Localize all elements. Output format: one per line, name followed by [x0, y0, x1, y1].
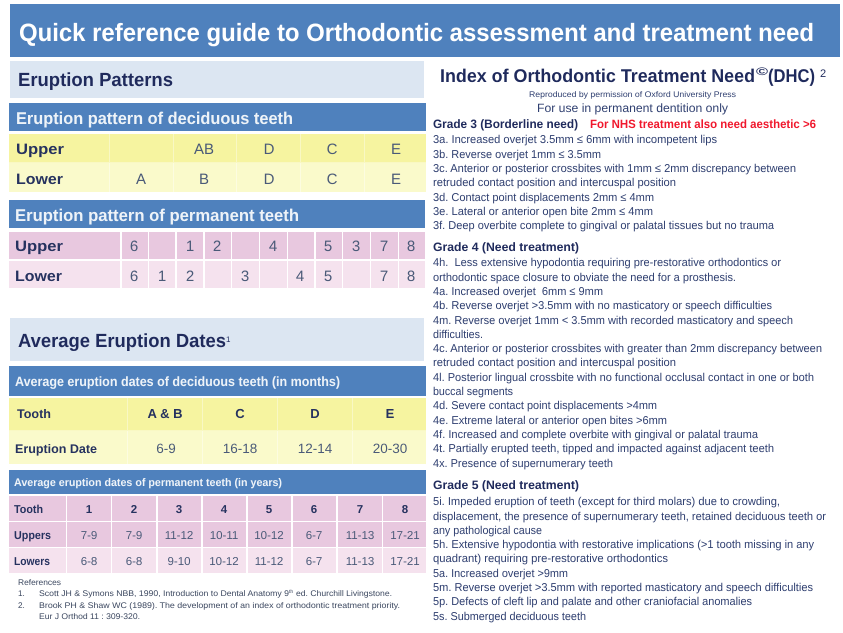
table: eruption pattern of permanent teeth: 5 [324, 238, 332, 255]
grade 4: Grade 4 (Need treatment) [433, 240, 579, 254]
index heading: Reproduced by permission of Oxford University Press [529, 90, 736, 99]
index heading [440, 65, 826, 115]
grade 3: 3e. Lateral or anterior open bite 2mm ≤ 4mm [433, 206, 653, 218]
table: eruption pattern of permanent teeth: 7 [380, 238, 388, 255]
table: permanent eruption dates in years: 7-9 [81, 530, 97, 542]
table: deciduous eruption dates in months: 20-30 [373, 441, 407, 456]
grade 5: quadrant) requiring pre-restorative orthodontics [433, 553, 668, 565]
grade 4: orthodontic space closure to obviate the need for a prosthesis. [433, 272, 736, 284]
grade 4: 4d. Severe contact point displacements >4mm [433, 400, 657, 412]
table: permanent eruption dates in years: Average eruption dates of permanent teeth (in years) [14, 477, 282, 489]
grade 3: For NHS treatment also need aesthetic >6 [590, 117, 816, 131]
grade 4: 4t. Partially erupted teeth, tipped and impacted against adjacent teeth [433, 443, 774, 455]
table: deciduous eruption dates in months: 16-18 [223, 441, 257, 456]
table: eruption pattern of permanent teeth: 2 [213, 238, 221, 255]
table: eruption pattern of permanent teeth: 4 [296, 268, 304, 285]
grade 3: 3a. Increased overjet 3.5mm ≤ 6mm with incompetent lips [433, 134, 717, 146]
table: eruption pattern of permanent teeth: Eruption pattern of permanent teeth [15, 206, 299, 225]
table: deciduous eruption dates in months: Eruption Date [15, 442, 97, 456]
table: permanent eruption dates in years: 11-13 [346, 530, 374, 542]
table: permanent eruption dates in years: 11-12 [255, 556, 283, 568]
table: permanent eruption dates in years: 11-13 [346, 556, 374, 568]
title banner: Quick reference guide to Orthodontic assessment and treatment need [19, 19, 814, 47]
grade 5: 5p. Defects of cleft lip and palate and other craniofacial anomalies [433, 596, 752, 608]
title banner [10, 4, 840, 57]
table: eruption pattern of permanent teeth: Upper [15, 238, 63, 255]
table: eruption pattern of permanent teeth: 6 [130, 238, 138, 255]
table: permanent eruption dates in years: 17-21 [390, 556, 420, 568]
table: eruption pattern of deciduous teeth: A [136, 171, 146, 188]
table: deciduous eruption dates in months: E [386, 406, 395, 421]
references: th [289, 589, 293, 595]
table: eruption pattern of deciduous teeth: AB [194, 141, 214, 158]
table: eruption pattern of deciduous teeth [9, 103, 426, 192]
heading: average eruption dates: Average Eruption Dates [18, 331, 226, 352]
grade 4: 4x. Presence of supernumerary teeth [433, 458, 613, 470]
references: References [18, 578, 61, 587]
table: eruption pattern of permanent teeth: 8 [407, 238, 415, 255]
table: eruption pattern of permanent teeth: 1 [158, 268, 166, 285]
table: deciduous eruption dates in months: 12-14 [298, 441, 333, 456]
table: permanent eruption dates in years: Lowers [14, 556, 50, 568]
grade 4: buccal segments [433, 386, 513, 398]
grade 5: displacement, the presence of supernumerary teeth, retained deciduous teeth or [433, 511, 826, 523]
references: ed. Churchill Livingstone. [296, 589, 392, 598]
heading: average eruption dates [10, 318, 424, 361]
heading: eruption patterns: Eruption Patterns [18, 70, 173, 91]
table: permanent eruption dates in years: 10-11 [210, 530, 238, 542]
grade 4: 4m. Reverse overjet 1mm < 3.5mm with recorded masticatory and speech [433, 315, 793, 327]
grade 4: 4b. Reverse overjet >3.5mm with no masticatory or speech difficulties [433, 300, 772, 312]
grade 4 [433, 240, 822, 470]
table: eruption pattern of deciduous teeth: Upper [16, 141, 64, 158]
grade 5: Grade 5 (Need treatment) [433, 478, 579, 492]
table: permanent eruption dates in years: 10-12 [209, 556, 239, 568]
panel: average eruption dates [9, 318, 426, 621]
table: permanent eruption dates in years: Uppers [14, 530, 51, 542]
grade 4: 4e. Extreme lateral or anterior open bites >6mm [433, 415, 667, 427]
table: permanent eruption dates in years: 7-9 [126, 530, 142, 542]
grade 5: 5i. Impeded eruption of teeth (except for third molars) due to crowding, [433, 496, 780, 508]
table: deciduous eruption dates in months: D [310, 406, 320, 421]
table: eruption pattern of permanent teeth: 5 [324, 268, 332, 285]
grade 5: any pathological cause [433, 525, 542, 537]
table: permanent eruption dates in years: 6-7 [306, 556, 322, 568]
references: Scott JH & Symons NBB, 1990, Introduction to Dental Anatomy 9 [39, 589, 289, 598]
table: eruption pattern of deciduous teeth: C [327, 171, 338, 188]
heading: average eruption dates: 1 [226, 335, 231, 344]
table: eruption pattern of permanent teeth: 2 [186, 268, 194, 285]
table: permanent eruption dates in years: 4 [221, 504, 228, 516]
table: eruption pattern of permanent teeth: Lower [15, 268, 62, 285]
table: eruption pattern of permanent teeth: 8 [407, 268, 415, 285]
grade 3: 3b. Reverse overjet 1mm ≤ 3.5mm [433, 149, 601, 161]
grade 5 [433, 478, 826, 623]
table: permanent eruption dates in years: 5 [266, 504, 273, 516]
grade 3: 3c. Anterior or posterior crossbites with 1mm ≤ 2mm discrepancy between [433, 163, 796, 175]
table: permanent eruption dates in years: 11-12 [165, 530, 193, 542]
table: eruption pattern of permanent teeth: 3 [352, 238, 360, 255]
table: permanent eruption dates in years: 1 [86, 504, 93, 516]
table: permanent eruption dates in years: 6-8 [81, 556, 97, 568]
table: permanent eruption dates in years: 17-21 [390, 530, 420, 542]
table: permanent eruption dates in years: 8 [402, 504, 409, 516]
grade 5: 5h. Extensive hypodontia with restorative implications (>1 tooth missing in any [433, 539, 814, 551]
references: 1. [18, 589, 25, 598]
index heading: © [756, 66, 768, 78]
table: permanent eruption dates in years: 6 [311, 504, 317, 516]
heading: eruption patterns [10, 61, 424, 98]
table: permanent eruption dates in years: Tooth [14, 504, 43, 516]
grade 5: 5s. Submerged deciduous teeth [433, 611, 586, 623]
table: permanent eruption dates in years: 9-10 [167, 556, 191, 568]
table: permanent eruption dates in years: 6-8 [126, 556, 142, 568]
table: permanent eruption dates in years: 7 [357, 504, 363, 516]
references: Eur J Orthod 11 : 309-320. [39, 612, 140, 621]
index heading: Index of Orthodontic Treatment Need [440, 65, 755, 86]
table: eruption pattern of permanent teeth: 6 [130, 268, 138, 285]
table: eruption pattern of permanent teeth [9, 200, 425, 288]
table: eruption pattern of permanent teeth: 4 [269, 238, 277, 255]
table: permanent eruption dates in years: 10-12 [254, 530, 284, 542]
grade 5: 5a. Increased overjet >9mm [433, 568, 568, 580]
table: permanent eruption dates in years: 2 [131, 504, 137, 516]
table: eruption pattern of deciduous teeth: Eruption pattern of deciduous teeth [16, 109, 293, 128]
table: eruption pattern of deciduous teeth: D [264, 171, 275, 188]
references [18, 578, 400, 621]
grade 4: retruded contact position and intercuspal position [433, 357, 676, 369]
table: deciduous eruption dates in months: A & B [148, 406, 182, 421]
table: deciduous eruption dates in months: Average eruption dates of deciduous teeth (in months) [15, 374, 340, 389]
table: eruption pattern of deciduous teeth: C [327, 141, 338, 158]
table: deciduous eruption dates in months: Tooth [17, 407, 51, 421]
table: eruption pattern of deciduous teeth: D [264, 141, 275, 158]
grade 4: 4l. Posterior lingual crossbite with no functional occlusal contact in one or both [433, 372, 814, 384]
grade 3 [433, 117, 816, 232]
table: deciduous eruption dates in months: 6-9 [156, 441, 176, 456]
table: permanent eruption dates in years: 3 [176, 504, 182, 516]
table: deciduous eruption dates in months [9, 366, 426, 464]
table: permanent eruption dates in years: 6-7 [306, 530, 322, 542]
grade 4: difficulties. [433, 329, 483, 341]
grade 3: 3f. Deep overbite complete to gingival or palatal tissues but no trauma [433, 220, 775, 232]
grade 4: 4c. Anterior or posterior crossbites with greater than 2mm discrepancy between [433, 343, 822, 355]
references: 2. [18, 601, 25, 610]
table: eruption pattern of permanent teeth: 1 [186, 238, 194, 255]
grade 4: 4a. Increased overjet 6mm ≤ 9mm [433, 286, 603, 298]
index heading: 2 [820, 68, 826, 80]
table: eruption pattern of deciduous teeth: E [391, 141, 401, 158]
panel: eruption patterns [9, 61, 426, 288]
table: eruption pattern of deciduous teeth: B [199, 171, 209, 188]
table: deciduous eruption dates in months: C [235, 406, 245, 421]
grade 3: 3d. Contact point displacements 2mm ≤ 4mm [433, 192, 654, 204]
references: Brook PH & Shaw WC (1989). The development of an index of orthodontic treatment priority. [39, 601, 400, 610]
grade 3: retruded contact position and intercuspal position [433, 177, 676, 189]
grade 3: Grade 3 (Borderline need) [433, 117, 578, 131]
table: eruption pattern of permanent teeth: 3 [241, 268, 249, 285]
table: eruption pattern of deciduous teeth: Lower [16, 171, 63, 188]
panel: index of orthodontic treatment need [433, 65, 826, 623]
grade 4: 4h. Less extensive hypodontia requiring pre-restorative orthodontics or [433, 257, 781, 269]
table: permanent eruption dates in years [9, 470, 426, 573]
index heading: For use in permanent dentition only [537, 101, 728, 115]
table: eruption pattern of deciduous teeth: E [391, 171, 401, 188]
grade 5: 5m. Reverse overjet >3.5mm with reported masticatory and speech difficulties [433, 582, 813, 594]
index heading: (DHC) [768, 65, 815, 86]
table: eruption pattern of permanent teeth: 7 [380, 268, 388, 285]
grade 4: 4f. Increased and complete overbite with gingival or palatal trauma [433, 429, 759, 441]
